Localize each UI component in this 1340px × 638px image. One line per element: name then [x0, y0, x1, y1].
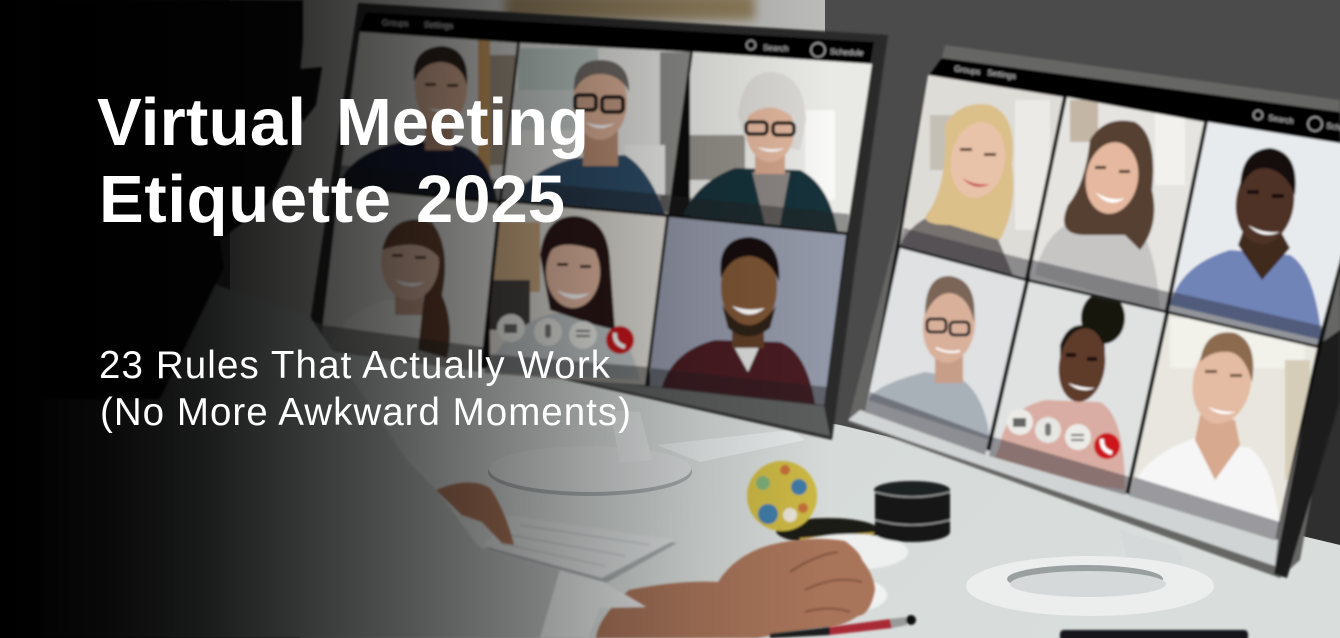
title: Etiquette: [99, 162, 391, 237]
dark tray: [776, 518, 880, 545]
subtitle: 23 Rules That Actually Work: [99, 344, 611, 387]
keyboard: [484, 515, 677, 584]
mouse: [792, 534, 908, 570]
monitor one: top bar: [358, 12, 874, 66]
monitor two: [848, 45, 1340, 578]
hand on keyboard: [436, 482, 514, 545]
tile: man in blue shirt: [1165, 120, 1340, 350]
monitor two: right dark bezel: [1274, 330, 1340, 578]
subtitle: (No More Awkward Moments): [100, 391, 631, 434]
monitor two: toolbar labels: Groups: [954, 64, 981, 77]
second mouse under fingers: [823, 579, 887, 611]
stress ball: [747, 461, 817, 531]
title: Virtual: [97, 85, 306, 160]
desk items: [484, 461, 1248, 638]
shirt: [40, 277, 646, 638]
monitor two: lower silver bezel: [848, 410, 1278, 566]
hair: [38, 0, 303, 400]
pen: [770, 615, 916, 638]
shirt cuff: [540, 570, 646, 638]
monitor two: top bar: [928, 58, 1340, 146]
speaker: [874, 481, 950, 542]
monitor one: toolbar labels: [382, 18, 864, 58]
finger gaps: [790, 552, 862, 612]
monitor one: toolbar labels: Search: [763, 43, 789, 53]
tile: man with glasses and blue shirt: [500, 40, 700, 220]
monitor two: toolbar labels: Search: [1268, 113, 1294, 126]
tile: blonde woman with glasses: [680, 50, 880, 240]
tile: woman with ponytail: [322, 188, 500, 369]
monitor two: stand: [966, 530, 1214, 616]
tile: man in white shirt: [1125, 310, 1325, 545]
tile: brunette woman: [1030, 95, 1210, 315]
title: 2025: [416, 162, 565, 237]
monitor two: toolbar labels: Settings: [987, 68, 1017, 81]
tile: blonde woman: [898, 73, 1065, 280]
tile: man with glasses: [860, 245, 1030, 460]
monitor one: tile footer strips: [320, 165, 849, 405]
tile: smiling woman with call controls: [485, 200, 670, 390]
monitor one: toolbar labels: Settings: [424, 20, 453, 31]
monitor one: toolbar labels: Groups: [382, 18, 409, 28]
monitor one: [310, 3, 888, 440]
call controls: [1007, 409, 1120, 459]
monitor two: bezel: [848, 45, 1340, 578]
tile: man in maroon shirt: [650, 215, 850, 410]
monitor one: toolbar labels: Schedule: [830, 47, 864, 58]
tile: woman with hair bun and call controls: [985, 280, 1170, 500]
tile: man in navy shirt: [339, 30, 518, 202]
monitor one: stand: [488, 410, 805, 496]
title: Meeting: [336, 85, 589, 160]
glasses: [269, 67, 322, 122]
monitor two: grid backing: [865, 75, 1340, 540]
monitor one: bezel: [310, 3, 888, 440]
phone at bottom edge: [1060, 630, 1248, 638]
desk surface: [300, 330, 1340, 638]
subtitle: [99, 344, 631, 434]
call controls: [497, 314, 634, 354]
monitor one: lower bezel: [312, 322, 830, 436]
monitor two: tile footer strips: [865, 228, 1322, 540]
monitor one: grid backing: [320, 30, 872, 405]
person at the desk: [38, 0, 875, 638]
monitor two: toolbar labels: [954, 64, 1340, 135]
hand on mouse: [596, 539, 875, 638]
title: [97, 85, 589, 237]
